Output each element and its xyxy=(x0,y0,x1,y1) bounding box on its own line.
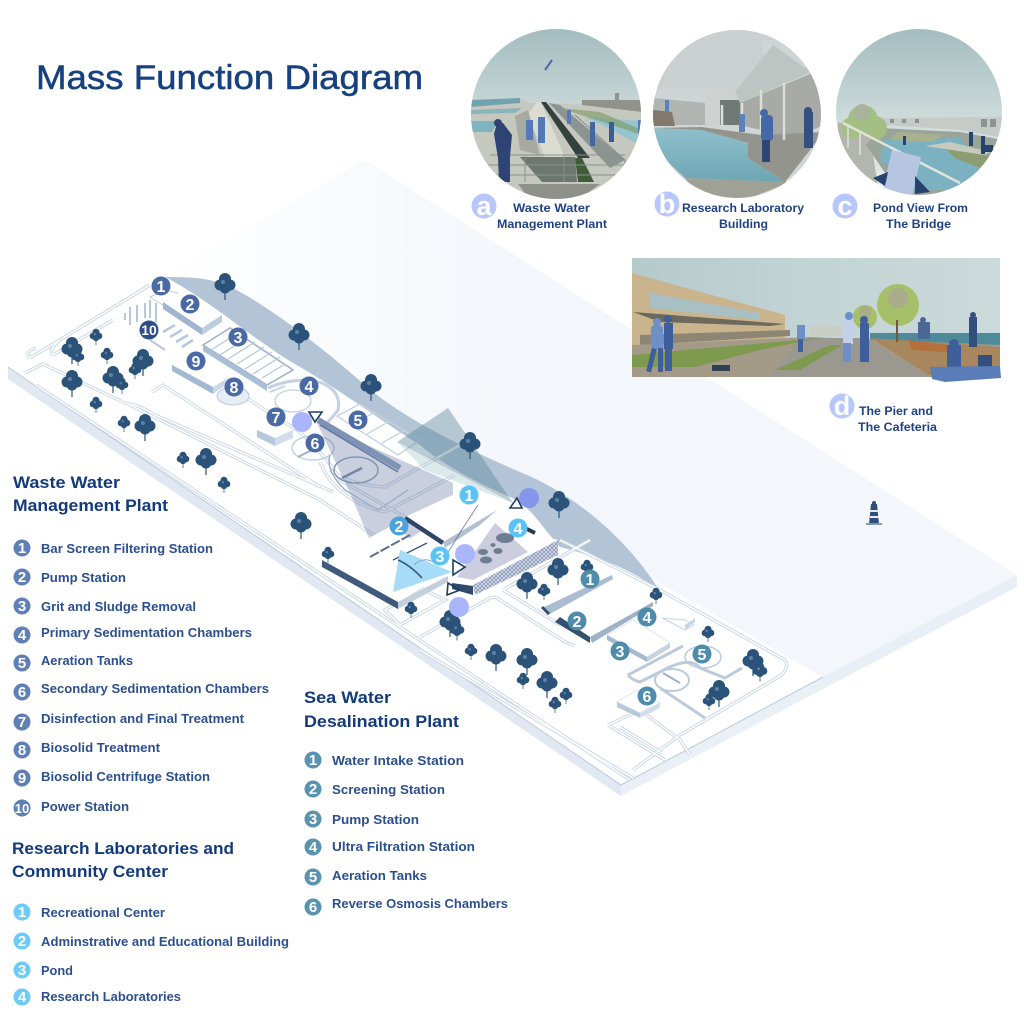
map labels: desalination plant: 4 xyxy=(643,610,652,627)
legend: research laboratories and community center xyxy=(12,839,289,1006)
waste water plant buildings xyxy=(125,290,420,460)
legend: sea water desalination plant: 1 xyxy=(309,752,317,769)
map labels: desalination plant: 2 xyxy=(573,614,582,631)
building 9 xyxy=(172,353,230,394)
legend: research laboratories and community center: Pond xyxy=(41,964,73,978)
perspective cone 2: teal xyxy=(397,408,513,503)
legend: sea water desalination plant: 4 xyxy=(309,839,318,856)
view b: research laboratory building xyxy=(653,30,821,198)
legend: waste water management plant: 9 xyxy=(18,770,26,787)
caption b: b xyxy=(659,189,675,219)
map labels: research center: 1 xyxy=(465,488,474,505)
legend: research laboratories and community center: Research Laboratories xyxy=(41,990,181,1004)
sea water desalination plant buildings xyxy=(542,575,742,718)
map labels: research center: 3 xyxy=(436,549,445,566)
map labels: waste water plant: 4 xyxy=(305,379,314,396)
legend: research laboratories and community center: 2 xyxy=(18,933,26,950)
admin block xyxy=(325,525,450,602)
legend: research laboratories and community center: Research Laboratories and xyxy=(12,839,234,858)
map labels: waste water plant: 3 xyxy=(234,330,243,347)
sedimentation rings 4 and 6 xyxy=(268,380,339,460)
legend: waste water management plant: Primary Sedimentation Chambers xyxy=(41,626,252,640)
legend: sea water desalination plant xyxy=(304,688,508,916)
map labels: research center: 4 xyxy=(514,521,523,538)
legend: sea water desalination plant: Desalination Plant xyxy=(304,712,459,731)
legend: waste water management plant: 2 xyxy=(18,569,26,586)
legend: waste water management plant: Disinfection and Final Treatment xyxy=(41,712,245,726)
legend: waste water management plant: 4 xyxy=(18,627,27,644)
legend: waste water management plant: Biosolid Treatment xyxy=(41,741,161,755)
map labels: research center xyxy=(390,486,528,566)
legend: waste water management plant: Grit and Sludge Removal xyxy=(41,600,196,614)
legend: sea water desalination plant: Ultra Filtration Station xyxy=(332,840,475,854)
legend: waste water management plant: 8 xyxy=(18,742,26,759)
trees xyxy=(62,273,767,713)
caption d: The Cafeteria xyxy=(858,420,937,434)
view c: pond view from the bridge xyxy=(836,28,1004,200)
map labels: waste water plant: 6 xyxy=(311,436,320,453)
legend: waste water management plant: 1 xyxy=(18,540,26,557)
viewpoints xyxy=(292,412,539,617)
legend: sea water desalination plant: Sea Water xyxy=(304,688,391,707)
map labels: waste water plant xyxy=(140,276,368,453)
site platform xyxy=(8,277,823,796)
caption a: a xyxy=(476,191,492,221)
legend: sea water desalination plant: Screening Station xyxy=(332,783,445,797)
map labels: desalination plant xyxy=(568,570,712,706)
map labels: waste water plant: 10 xyxy=(141,322,157,338)
caption d xyxy=(830,391,937,434)
cyan pond view cone xyxy=(393,550,452,592)
legend: waste water management plant: Management Plant xyxy=(13,496,168,515)
map labels: desalination plant: 6 xyxy=(643,689,652,706)
caption c: The Bridge xyxy=(886,217,951,231)
caption a: Waste Water xyxy=(513,201,590,215)
bridge pipeline and ponds over cone xyxy=(318,420,408,510)
legend: waste water management plant: Pump Station xyxy=(41,571,126,585)
legend: waste water management plant: Power Station xyxy=(41,800,129,814)
legend: research laboratories and community center: Adminstrative and Educational Building xyxy=(41,935,289,949)
caption b: Research Laboratory xyxy=(682,201,804,215)
building 1 and 2 xyxy=(150,290,222,335)
legend: sea water desalination plant: Aeration Tanks xyxy=(332,869,427,883)
legend: sea water desalination plant: 5 xyxy=(309,869,317,886)
view d: pier and cafeteria xyxy=(632,258,1000,377)
icon: lighthouse xyxy=(866,501,882,525)
legend: waste water management plant: 7 xyxy=(18,714,26,731)
caption b xyxy=(654,189,804,231)
legend: waste water management plant: Aeration Tanks xyxy=(41,654,133,668)
caption c: c xyxy=(837,191,853,221)
shoreline band xyxy=(165,277,659,590)
legend: sea water desalination plant: 2 xyxy=(309,781,317,798)
map labels: waste water plant: 8 xyxy=(230,380,239,397)
perspective cone 1: big grey-blue xyxy=(317,423,453,560)
legend: sea water desalination plant: Pump Station xyxy=(332,813,419,827)
recreational block xyxy=(405,487,510,543)
legend: waste water management plant: Secondary Sedimentation Chambers xyxy=(41,682,269,696)
laboratory roof xyxy=(457,523,558,585)
map labels: waste water plant: 2 xyxy=(186,297,195,314)
caption c: Pond View From xyxy=(873,201,968,215)
legend: sea water desalination plant: 3 xyxy=(309,811,317,828)
legend: waste water management plant: 6 xyxy=(18,684,26,701)
power station equipment xyxy=(125,300,193,350)
legend: sea water desalination plant: Water Intake Station xyxy=(332,754,464,768)
legend: waste water management plant: Waste Water xyxy=(13,473,120,492)
caption b: Building xyxy=(719,217,768,231)
title: Mass Function Diagram xyxy=(36,59,423,97)
tank 3 xyxy=(203,328,293,391)
caption d: d xyxy=(834,391,850,421)
research laboratories and community center xyxy=(322,487,558,609)
map labels: waste water plant: 9 xyxy=(192,354,201,371)
legend: sea water desalination plant: 6 xyxy=(309,899,317,916)
aeration tanks 5 xyxy=(337,404,420,455)
legend: research laboratories and community center: Recreational Center xyxy=(41,906,165,920)
map labels: research center: 2 xyxy=(395,519,404,536)
caption d: The Pier and xyxy=(859,404,933,418)
site roads and outlines xyxy=(25,285,787,780)
figure at picnic blanket xyxy=(930,366,1001,382)
map labels: desalination plant: 5 xyxy=(698,647,707,664)
sea plane xyxy=(160,160,1017,689)
legend: waste water management plant: Bar Screen Filtering Station xyxy=(41,542,213,556)
map labels: waste water plant: 5 xyxy=(354,413,363,430)
map labels: waste water plant: 1 xyxy=(157,279,166,296)
legend: waste water management plant: 5 xyxy=(18,655,26,672)
legend: sea water desalination plant: Reverse Osmosis Chambers xyxy=(332,897,508,911)
caption a: Management Plant xyxy=(497,217,607,231)
biosolid 8 xyxy=(217,387,249,405)
caption c xyxy=(832,191,968,231)
map labels: desalination plant: 3 xyxy=(616,644,625,661)
caption a xyxy=(472,191,607,231)
legend: research laboratories and community center: 1 xyxy=(18,904,26,921)
view a: waste water plant xyxy=(470,28,642,200)
legend: waste water management plant: 10 xyxy=(15,801,29,816)
map labels: desalination plant: 1 xyxy=(586,572,595,589)
legend: waste water management plant: Biosolid Centrifuge Station xyxy=(41,770,210,784)
legend: research laboratories and community center: Community Center xyxy=(12,862,168,881)
map labels: waste water plant: 7 xyxy=(272,410,281,427)
disinfection 7 xyxy=(257,420,293,446)
legend: research laboratories and community center: 3 xyxy=(18,962,26,979)
legend: waste water management plant: 3 xyxy=(18,598,26,615)
legend: waste water management plant xyxy=(13,473,269,816)
legend: research laboratories and community center: 4 xyxy=(18,989,27,1006)
